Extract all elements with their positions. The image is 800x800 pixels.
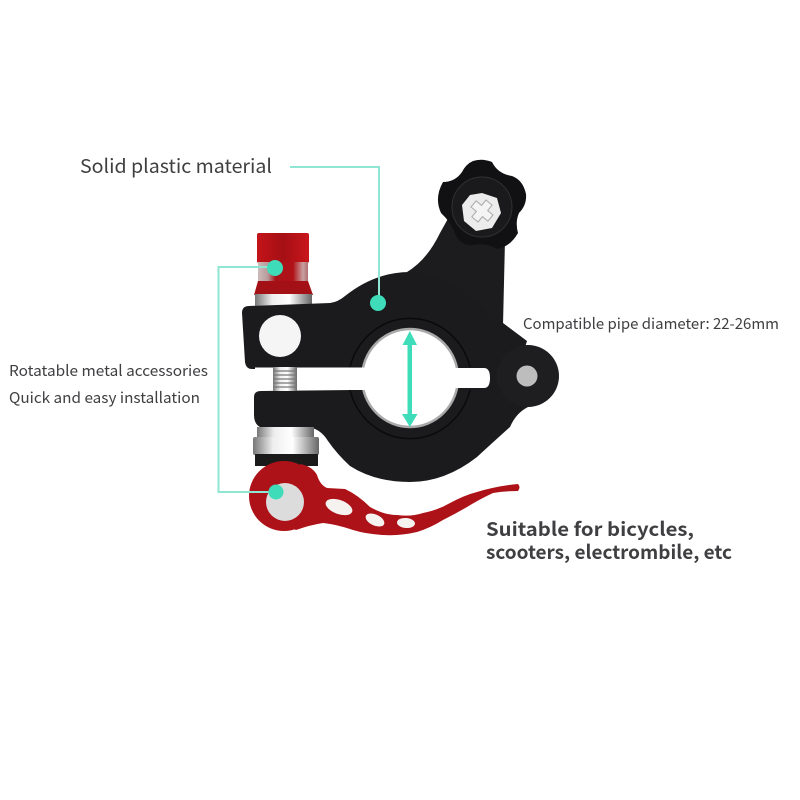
label: compatible pipe diameter: Compatible pipe diameter: 22-26mm	[523, 313, 779, 334]
lower clamp jaw	[254, 360, 528, 482]
note: suitable vehicles	[486, 515, 732, 565]
note: suitable vehicles: Suitable for bicycles,	[486, 515, 694, 542]
hex bolt with cross	[462, 193, 501, 231]
note: suitable vehicles: scooters, electrombile, etc	[486, 538, 732, 565]
star knob	[438, 160, 526, 249]
callout: rotatable metal accessories	[9, 260, 284, 500]
hinge circle	[497, 345, 559, 407]
lever pivot	[266, 483, 304, 521]
marker dot	[370, 295, 386, 311]
knob arm of clamp	[407, 215, 505, 335]
lever marker	[268, 484, 284, 500]
red top nut	[254, 233, 313, 306]
red quick-release lever	[249, 461, 520, 535]
bracket line	[218, 267, 276, 492]
upper clamp jaw	[242, 272, 527, 395]
white cap on clamp	[259, 315, 301, 357]
hinge pin	[516, 366, 538, 386]
pipe opening	[255, 318, 490, 439]
label lines: Rotatable metal accessories	[9, 360, 208, 381]
silver spacer washers	[253, 427, 319, 466]
label: quick installation: Quick and easy installation	[9, 387, 200, 408]
arrow: pipe diameter	[402, 331, 418, 427]
callout: solid plastic material	[80, 152, 386, 311]
knob socket	[452, 177, 512, 237]
product: bicycle clamp mount	[242, 160, 559, 535]
threaded screw	[273, 367, 297, 391]
lever holes	[323, 496, 415, 529]
nut marker	[267, 260, 283, 276]
label: Solid plastic material	[80, 152, 272, 179]
leader line	[290, 167, 379, 303]
